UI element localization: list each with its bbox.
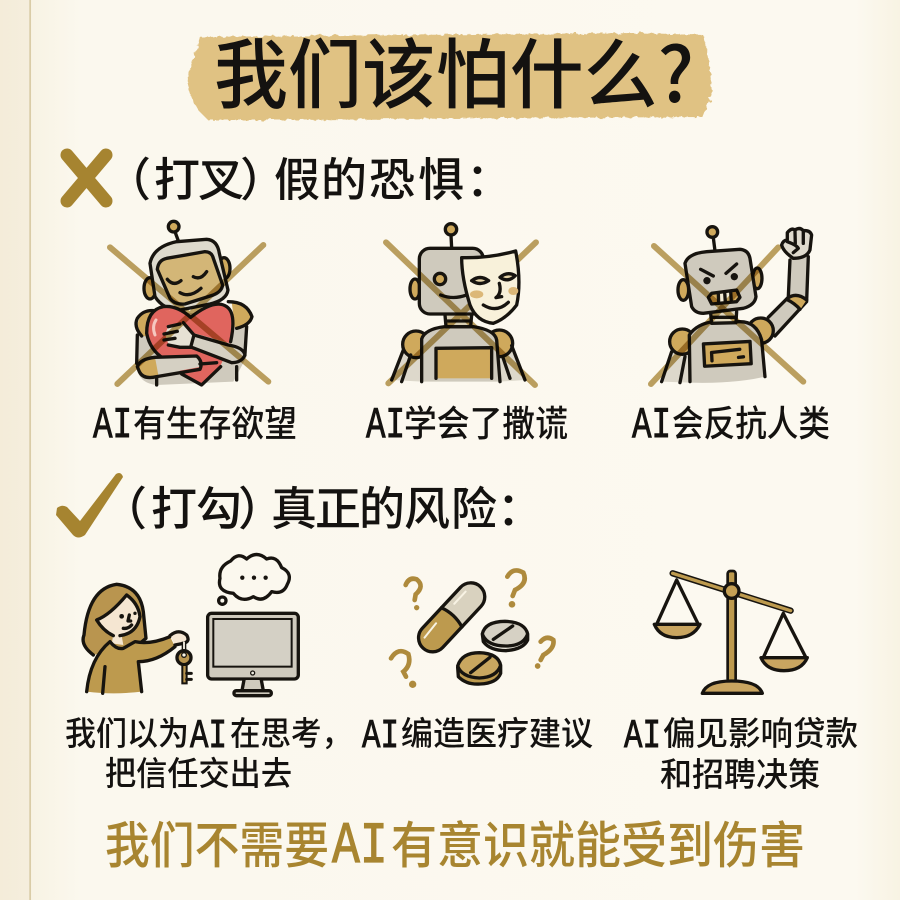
label: trusting AI: 我们以为 — [65, 707, 189, 755]
heading: fake fears: （打叉）假的恐惧： — [105, 144, 512, 210]
label: bias in loans and hiring: 偏见影响贷款 — [663, 707, 858, 755]
label: bias in loans and hiring: 和招聘决策 — [660, 748, 820, 796]
icon: question marks — [391, 570, 554, 688]
label: trusting AI: 把信任交出去 — [105, 747, 292, 795]
heading: real risks: （打勾）真正的风险： — [101, 473, 543, 539]
icon: thought cloud — [219, 554, 289, 604]
conclusion: AI — [332, 813, 388, 880]
conclusion: 有意识就能受到伤害 — [391, 806, 805, 878]
icon: raised fist — [782, 228, 812, 258]
icon: robot with mask — [386, 224, 536, 385]
label: robot survival — [93, 395, 297, 451]
label: robot survival: AI — [93, 401, 132, 451]
label: robot lying: 学会了撒谎 — [404, 395, 568, 447]
label: robot rebellion: 会反抗人类 — [672, 395, 830, 447]
icon: angry robot with raised fist — [651, 227, 812, 384]
label: bias in loans and hiring: AI — [624, 713, 661, 759]
icon: robot hugging heart — [110, 221, 268, 385]
title highlight band — [188, 33, 712, 120]
icon: theatre mask — [462, 251, 519, 323]
label: medical advice: 编造医疗建议 — [401, 707, 593, 755]
label: robot rebellion: AI — [632, 401, 671, 451]
label: medical advice: AI — [362, 713, 399, 759]
label: robot lying: AI — [366, 401, 405, 451]
icon: computer monitor — [208, 613, 298, 696]
icon: pills and question marks — [391, 570, 554, 688]
title: 我们该怕什么? — [214, 14, 694, 124]
icon: section check mark — [56, 473, 123, 538]
label: robot rebellion — [632, 395, 830, 451]
icon: person handing keys to computer — [83, 554, 298, 696]
label: trusting AI — [65, 707, 352, 795]
conclusion — [105, 806, 805, 880]
icon: tilted balance scale — [654, 571, 807, 693]
label: bias in loans and hiring — [624, 707, 858, 796]
conclusion: 我们不需要 — [105, 806, 329, 878]
label: trusting AI: AI — [190, 713, 227, 759]
icon: section cross — [67, 155, 106, 201]
label: robot survival: 有生存欲望 — [133, 395, 297, 447]
label: trusting AI: 在思考， — [230, 707, 352, 755]
icon: key — [176, 642, 192, 683]
